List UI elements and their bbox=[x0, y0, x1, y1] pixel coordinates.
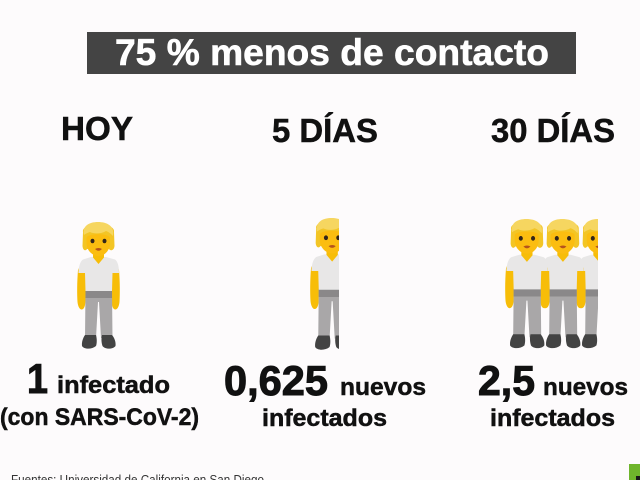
text: 30 days count: nuevos bbox=[543, 374, 628, 401]
text: today count: 1 bbox=[27, 355, 48, 402]
text: 30 days count bbox=[478, 357, 628, 432]
logo mark bbox=[629, 464, 640, 480]
icon: one person today bbox=[77, 222, 120, 349]
heading: 30 días: 30 DÍAS bbox=[491, 112, 615, 149]
title: 75 % menos de contacto bbox=[115, 32, 549, 73]
text: today count: infectado bbox=[57, 372, 170, 399]
text: 30 days count: 2,5 bbox=[478, 357, 535, 404]
text: 5 days count: infectados bbox=[262, 405, 387, 432]
text: today count: (con SARS-CoV-2) bbox=[0, 404, 199, 431]
heading: 5 días: 5 DÍAS bbox=[272, 112, 378, 149]
heading: hoy: HOY bbox=[61, 110, 133, 147]
icon: people at 30 days bbox=[505, 219, 598, 348]
text: 5 days count bbox=[224, 357, 426, 432]
text: 5 days count: 0,625 bbox=[224, 357, 328, 404]
icon: partial person at 5 days bbox=[310, 218, 339, 350]
text: 30 days count: infectados bbox=[490, 405, 615, 432]
text: 5 days count: nuevos bbox=[340, 374, 426, 401]
text: today count bbox=[0, 355, 199, 431]
